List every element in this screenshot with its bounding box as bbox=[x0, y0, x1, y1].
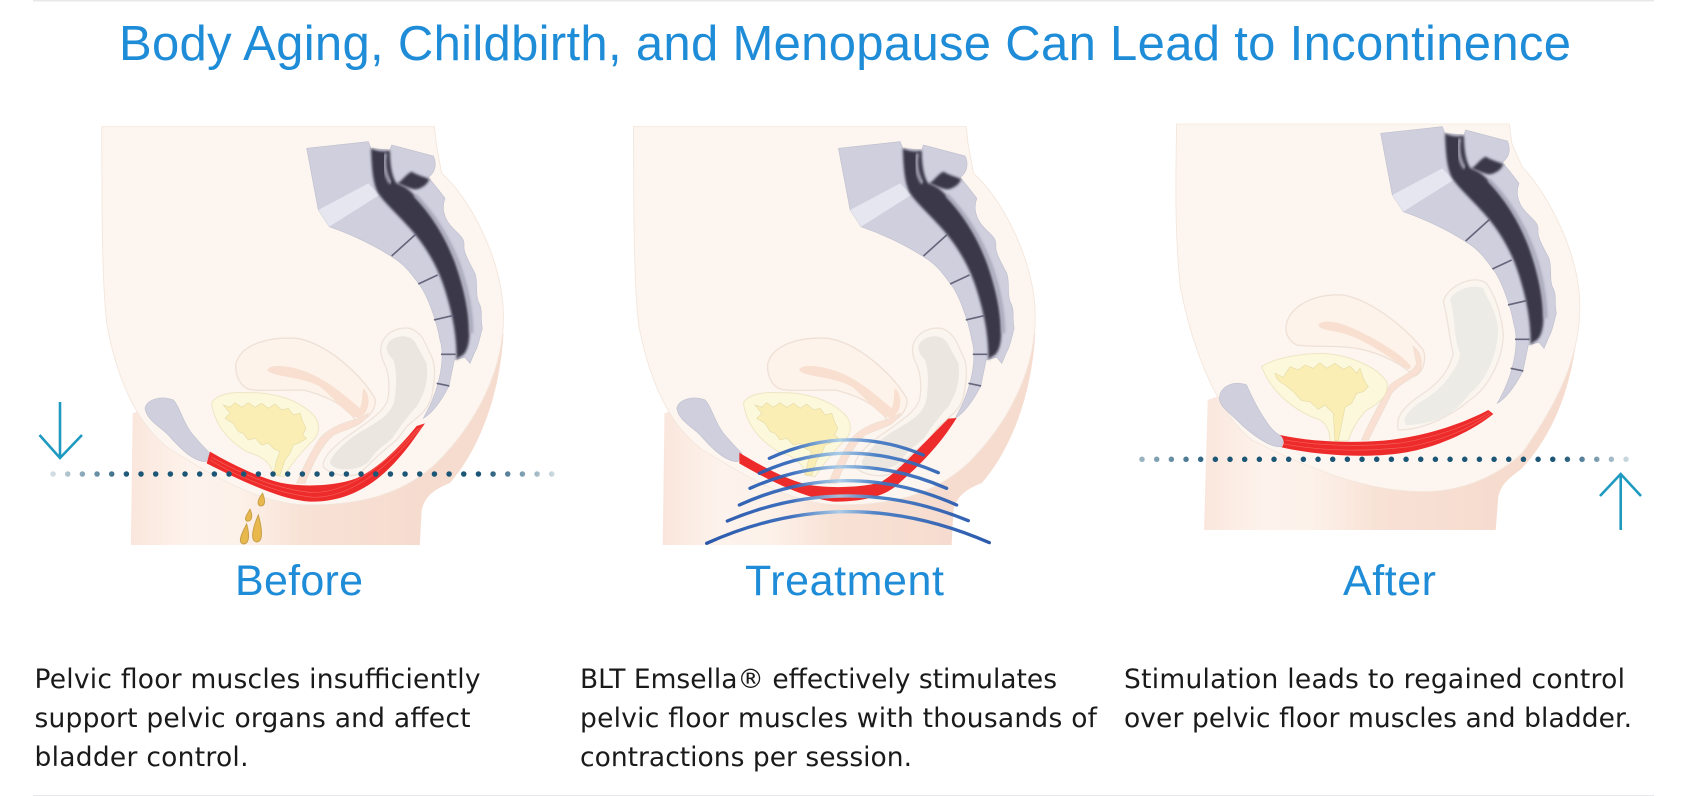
rectum interior bbox=[1405, 287, 1498, 425]
pelvic floor muscle restored bbox=[1280, 410, 1493, 456]
panel: after illustration bbox=[1142, 124, 1641, 530]
torso bbox=[1176, 124, 1580, 492]
pelvic floor muscle contracting bbox=[739, 418, 957, 502]
dotted level line bbox=[53, 471, 560, 477]
treatment body silhouette bbox=[634, 127, 1035, 545]
text block: before: Pelvic floor muscles insufficiently bbox=[34, 664, 480, 695]
panel: treatment illustration bbox=[634, 127, 1035, 545]
icon: down arrow bbox=[40, 402, 82, 458]
text block: before bbox=[34, 664, 480, 773]
text block: before: support pelvic organs and affect bbox=[34, 703, 470, 734]
pelvic floor muscle sagging bbox=[207, 423, 425, 502]
spine and sacrum bbox=[838, 142, 1014, 418]
pelvic organs and pubic bone bbox=[677, 328, 966, 483]
thighs bbox=[1204, 313, 1579, 530]
bladder interior bbox=[1275, 363, 1368, 441]
urine drops bbox=[240, 493, 265, 544]
text block: before: bladder control. bbox=[34, 742, 248, 773]
top rule bbox=[33, 0, 1654, 2]
uterine cavity bbox=[1318, 322, 1411, 369]
electromagnetic waves bbox=[707, 440, 989, 543]
before body silhouette bbox=[102, 127, 503, 545]
heading: before: Before bbox=[235, 557, 363, 605]
text block: treatment: contractions per session. bbox=[580, 742, 912, 773]
spine and sacrum bbox=[1381, 127, 1556, 403]
bladder bbox=[1262, 353, 1387, 442]
torso bbox=[634, 127, 1035, 505]
text block: treatment: BLT Emsella® effectively stimulates bbox=[580, 664, 1057, 695]
panel: before illustration bbox=[40, 127, 560, 545]
thighs bbox=[131, 333, 503, 545]
thighs bbox=[663, 333, 1035, 545]
heading: after: After bbox=[1343, 557, 1436, 605]
vaginal canal bbox=[1362, 347, 1421, 440]
after body silhouette bbox=[1176, 124, 1580, 530]
after pelvic organs bbox=[1262, 280, 1503, 442]
dotted level line bbox=[1142, 457, 1634, 462]
heading: treatment: Treatment bbox=[745, 557, 944, 605]
pelvic organs and pubic bone bbox=[145, 328, 435, 483]
text block: after: over pelvic floor muscles and bladder. bbox=[1124, 703, 1632, 734]
text block: after: Stimulation leads to regained control bbox=[1124, 664, 1625, 695]
rectum bbox=[1398, 280, 1503, 430]
text block: treatment: pelvic floor muscles with thousands of bbox=[580, 703, 1098, 734]
icon: up arrow bbox=[1600, 474, 1641, 530]
title: Body Aging, Childbirth, and Menopause Can Lead to Incontinence bbox=[119, 17, 1571, 71]
spine and sacrum bbox=[307, 142, 482, 418]
uterus bbox=[1286, 295, 1425, 377]
pubic bone bbox=[1219, 383, 1284, 447]
pubic bone and muscle bbox=[1219, 383, 1493, 456]
text block: after bbox=[1124, 664, 1632, 734]
bottom rule bbox=[33, 795, 1654, 796]
text block: treatment bbox=[580, 664, 1098, 773]
muscle fibres bbox=[1284, 413, 1491, 450]
torso bbox=[102, 127, 503, 505]
